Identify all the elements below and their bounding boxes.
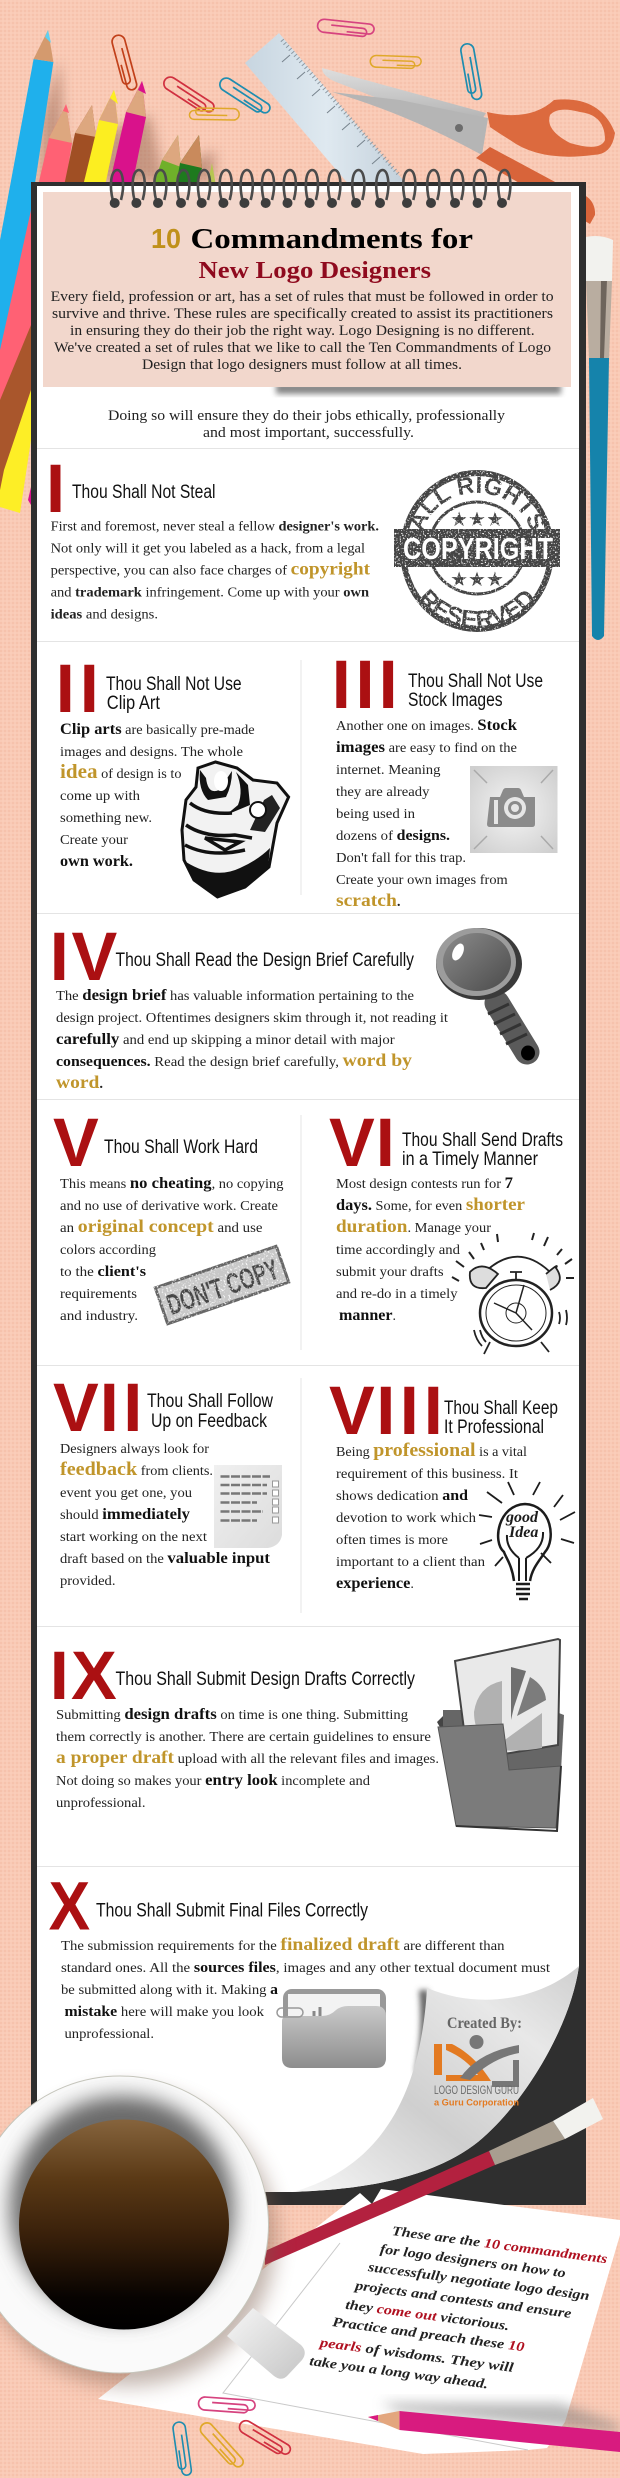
icon: magnifying glass [436,928,535,1060]
body text: Another one on images. Stock [336,717,517,734]
icon: pink pencil [368,2403,620,2452]
text: closing intro sentence: Doing so will ensure they do their jobs ethically, professionally [108,408,506,424]
coffee [19,2120,229,2330]
body text: Create your [60,832,129,847]
body text: submit your drafts [336,1264,444,1279]
icon: copyright stamp: RESERVED [422,588,532,626]
numeral: II [56,650,99,727]
notebook white page with curled corner edge [37,186,579,2192]
body text: a proper draft upload with all the relevant files and images. [56,1747,439,1767]
icon: copyright stamp: ★★★ [450,509,504,531]
heading: Thou Shall Not Use [106,674,242,695]
body text: an original concept and use [60,1216,262,1236]
panel: introduction [43,192,571,394]
icon: large pencils at the left edge [0,30,53,513]
body text: requirement of this business. It [336,1466,518,1481]
numeral: VII [53,1369,142,1446]
page curl [293,1966,579,2192]
heading: Thou Shall Send Drafts [402,1130,563,1151]
panel: commandment X [49,1868,550,2068]
body text: Not only will it get you labeled as a hack, from a legal [51,541,365,556]
icon: scissors [322,68,615,224]
body text [336,717,517,910]
numeral: V [53,1104,99,1181]
intro paragraph: in ensuring they do their job the right way. Logo Designing is no different. [70,323,535,339]
numeral: IV [50,918,118,995]
heading [408,671,543,711]
closing text: projects and contests and ensure [353,2277,572,2321]
body text: colors according [60,1242,156,1257]
body text [61,1934,550,2041]
heading: in a Timely Manner [402,1149,539,1170]
icon: paint brush at right edge [586,236,613,640]
body text: idea of design is to [60,761,182,783]
body text: The design brief has valuable information pertaining to the [56,987,414,1004]
body text: them correctly is another. There are certain guidelines to ensure [56,1729,431,1744]
heading [444,1398,558,1438]
body text: something new. [60,810,152,825]
body text: images and designs. The whole [60,744,243,759]
body text: requirements [60,1286,137,1301]
body text: being used in [336,806,415,821]
icon: copyright stamp: ★★★ [450,569,504,591]
paper sheets [98,2189,620,2454]
numeral: I [46,450,65,527]
body text: shows dedication and [336,1488,468,1504]
heading: Thou Shall Not Use [408,671,543,692]
heading: Thou Shall Follow [147,1391,273,1412]
panel shadow [276,383,561,394]
heading: Stock Images [408,690,503,711]
intro paragraph: Design that logo designers must follow at all times. [142,357,462,373]
body text: own work. [60,853,133,870]
shadows of pencils [40,60,215,230]
cup shadow [0,2090,276,2386]
body text: provided. [60,1573,116,1588]
body text: Clip arts are basically pre-made [60,721,255,738]
panel: commandment VIII [329,1372,575,1599]
numeral: X [49,1868,90,1944]
body text [60,1441,271,1588]
heading: Thou Shall Not Steal [72,482,216,503]
icon: copyright stamp [394,470,560,632]
heading: Thou Shall Submit Design Drafts Correctly [116,1669,415,1690]
body text: dozens of designs. [336,828,450,844]
illustration: desk supplies at the top [0,19,615,640]
icon: folder with pie chart document [437,1639,564,1831]
panel: commandment III [332,646,558,910]
body text: scratch . [336,890,400,910]
body text: Create your own images from [336,872,508,887]
body text: unprofessional. [64,2026,154,2041]
body text [60,721,255,870]
cup rim [0,2076,268,2373]
numeral: III [332,646,398,723]
body text: be submitted along with it. Making a [61,1982,279,1998]
body text [56,1706,439,1810]
body text: come up with [60,788,140,803]
body text: and re-do in a timely [336,1286,458,1301]
panel: commandment I [46,450,560,632]
panel: commandment VI [329,1104,574,1354]
body text: This means no cheating , no copying [60,1175,284,1192]
body text [60,1175,284,1323]
icon: alarm clock [452,1233,574,1354]
body text: Designers always look for [60,1441,210,1456]
closing text: take you a long way ahead. [309,2353,489,2391]
curl shadow [415,1990,431,2075]
icon: ruler [245,33,408,186]
icon: coffee cup [0,2076,305,2386]
body text: ideas and designs. [51,607,158,622]
icon: copyright stamp: COPYRIGHT [403,531,553,566]
notebook frame [31,182,586,2205]
heading: Up on Feedback [151,1411,267,1432]
icon: good idea light bulb [479,1482,575,1599]
numeral: VI [329,1104,395,1181]
note paper with closing text [98,2189,620,2454]
closing text: successfully negotiate logo design [366,2259,590,2303]
body text: design project. Oftentimes designers skim through it, not reading it [56,1010,448,1025]
numeral: VIII [329,1372,443,1449]
panel background [43,192,571,387]
intro paragraph [51,289,554,373]
body text: duration . Manage your [336,1216,492,1236]
heading [147,1391,273,1432]
closing text: pearls of wisdoms. They will [318,2334,515,2375]
curl sheet [293,1966,579,2192]
closing text [309,2223,608,2391]
icon: good idea light bulb: good [505,1509,539,1526]
icon: red paint brush [265,2098,603,2265]
body text: devotion to work which [336,1510,476,1525]
body text: consequences. Read the design brief carefully, word by [56,1050,412,1070]
body text: word. [56,1072,103,1092]
body text: internet. Meaning [336,762,441,777]
icon: pointing fist [182,762,289,897]
credit: created by logo [434,2015,522,2109]
heading: It Professional [444,1417,544,1438]
heading: Thou Shall Work Hard [104,1137,258,1158]
body text: mistake here will make you look [64,2004,264,2020]
body text: important to a client than [336,1554,485,1569]
body text: Being professional is a vital [336,1440,527,1461]
icon: paperclips [111,19,482,120]
body text: Most design contests run for 7 [336,1175,513,1192]
closing text: for logo designers on how to [379,2241,567,2280]
text: closing intro sentence [108,408,506,441]
panel: commandment IV [50,918,535,1092]
icon: don't copy stamp [155,1246,289,1324]
body text: start working on the next [60,1529,207,1544]
subtitle: New Logo Designers [198,258,431,284]
body text: Don't fall for this trap. [336,850,466,865]
body text: should immediately [60,1506,190,1523]
rim inner shading [10,2096,234,2320]
body text: carefully and end up skipping a minor detail with major [56,1031,395,1048]
title: Commandments for [190,224,473,255]
icon: bottom paperclips [172,2397,292,2476]
body text [336,1175,525,1324]
body text: and industry. [60,1308,138,1323]
body text: and trademark infringement. Come up with your own [51,585,370,600]
body text: time accordingly and [336,1242,460,1257]
body text: The submission requirements for the finalized draft are different than [61,1934,505,1954]
icon: spiral binding [110,170,510,208]
closing text: Practice and preach these 10 [332,2314,526,2354]
body text: standard ones. All the sources files , images and any other textual document must [61,1960,550,1976]
body text: feedback from clients. [60,1459,213,1480]
body text: manner. [339,1307,396,1324]
closing text: These are the 10 commandments [391,2223,608,2266]
icon: checklist page [214,1465,282,1548]
body text: experience . [336,1575,414,1592]
body text [56,987,448,1092]
icon: files folder [277,1989,386,2068]
heading [402,1130,563,1170]
body text: Not doing so makes your entry look incomplete and [56,1772,370,1789]
heading: Thou Shall Read the Design Brief Carefully [116,950,414,971]
cup handle [227,2308,305,2379]
body text: to the client's [60,1264,146,1280]
heading: Thou Shall Keep [444,1398,558,1419]
credit label: Created By: [447,2015,522,2032]
body text: perspective, you can also face charges of copyright [51,559,370,579]
panel: commandment II [56,650,289,897]
heading [106,674,242,714]
intro paragraph: We've created a set of rules that we like to call the Ten Commandments of Logo [54,340,551,356]
panel: commandment VII [53,1369,282,1588]
body text [51,519,379,622]
body text: Submitting design drafts on time is one thing. Submitting [56,1706,408,1723]
body text: and no use of derivative work. Create [60,1198,278,1213]
icon: stock image placeholder with camera [470,766,558,853]
body text: unprofessional. [56,1795,146,1810]
logo tagline: a Guru Corporation [434,2098,519,2109]
logo mark [434,2035,519,2087]
icon: copyright stamp: ALL RIGHTS [412,476,544,529]
text: closing intro sentence: and most important, successfully. [203,425,414,441]
panel: commandment IX [50,1637,564,1831]
body text: often times is more [336,1532,448,1547]
panel: commandment V [53,1104,289,1324]
numeral: IX [50,1637,117,1714]
body text: days. Some, for even shorter [336,1194,525,1214]
body text: they are already [336,784,430,799]
intro paragraph: Every field, profession or art, has a set of rules that must be followed in order to [51,289,554,305]
body text: images are easy to find on the [336,739,517,756]
body text: draft based on the valuable input [60,1550,271,1567]
icon: don't copy stamp: DON'T COPY [163,1254,283,1322]
title: 10 [151,223,181,254]
heading: Clip Art [107,693,161,714]
heading: Thou Shall Submit Final Files Correctly [96,1900,368,1922]
icon: small coloured pencils [38,81,216,186]
intro paragraph: survive and thrive. These rules are specifically created to assist its practitioners [52,306,553,322]
logo wordmark: LOGO DESIGN GURU [434,2083,519,2097]
body text [336,1440,527,1592]
closing text: they come out victorious. [345,2297,510,2333]
icon: good idea light bulb: Idea [508,1524,538,1541]
body text: First and foremost, never steal a fellow designer's work. [51,519,379,534]
body text: event you get one, you [60,1485,192,1500]
